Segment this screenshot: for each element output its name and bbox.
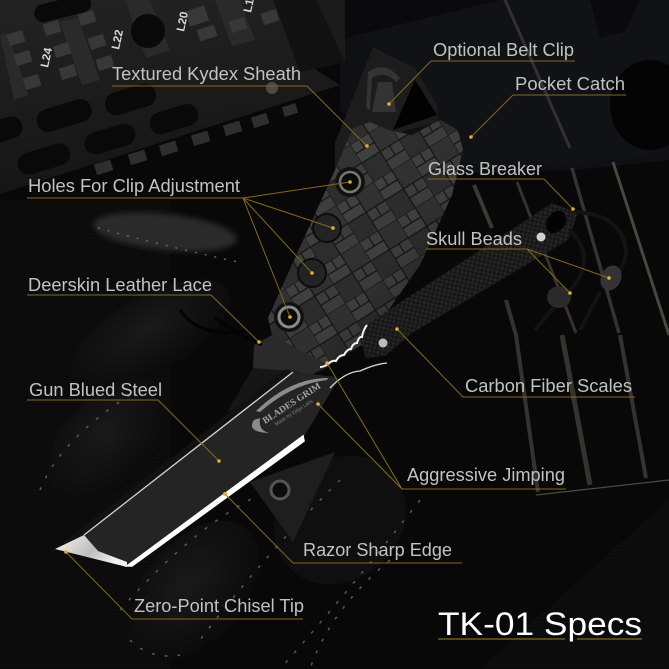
callout: optional belt clip: Optional Belt Clip xyxy=(433,39,574,60)
callout: carbon fiber scales xyxy=(395,327,635,397)
callout: aggressive jimping xyxy=(316,361,566,489)
rifle handguard: L24 xyxy=(39,46,55,69)
callout: gun blued steel xyxy=(27,379,221,463)
lanyard and skull beads xyxy=(535,212,626,330)
carbon fiber handle xyxy=(360,203,578,358)
callout: holes for clip adjustment xyxy=(27,175,352,319)
callout: deerskin leather lace xyxy=(27,274,261,344)
callout: skull beads: Skull Beads xyxy=(426,228,522,249)
callout: optional belt clip xyxy=(387,39,575,106)
cutting edge xyxy=(127,436,304,566)
callout: skull beads xyxy=(426,228,611,295)
rifle handguard: L20 xyxy=(175,11,191,33)
reaper logo xyxy=(366,67,400,112)
deerskin leather lace wrap xyxy=(180,310,330,412)
callout: gun blued steel: Gun Blued Steel xyxy=(29,379,162,400)
blade logo xyxy=(252,378,328,433)
glove xyxy=(25,207,432,669)
callout: glass breaker: Glass Breaker xyxy=(428,158,542,179)
blade logo: Made by Edge Labs xyxy=(274,398,315,428)
callout: textured kydex sheath: Textured Kydex Sheath xyxy=(112,63,301,84)
callout: pocket catch xyxy=(469,73,626,139)
clip hole lower grommet xyxy=(274,302,304,332)
clip hole grommet xyxy=(335,167,365,197)
skull bead left xyxy=(547,286,571,308)
blade xyxy=(55,325,387,567)
callout: holes for clip adjustment: Holes For Clip Adjustment xyxy=(28,175,240,196)
skull bead right xyxy=(596,262,626,294)
blade logo: BLADES GRIM xyxy=(261,381,323,427)
callout: glass breaker xyxy=(428,158,575,211)
callout: pocket catch: Pocket Catch xyxy=(515,73,625,94)
rifle handguard xyxy=(0,0,345,194)
chisel tip xyxy=(55,535,127,567)
callout: zero-point chisel tip: Zero-Point Chisel Tip xyxy=(134,595,304,616)
callout: textured kydex sheath xyxy=(112,63,369,148)
callout: aggressive jimping: Aggressive Jimping xyxy=(407,464,565,485)
callout: razor sharp edge xyxy=(223,492,462,563)
rifle receiver and magazine xyxy=(345,0,669,495)
belt clip xyxy=(335,47,438,172)
callout: deerskin leather lace: Deerskin Leather Lace xyxy=(28,274,212,295)
textured kydex sheath xyxy=(268,120,463,366)
blade dark bevel xyxy=(55,369,296,549)
rail teeth xyxy=(94,103,298,175)
clip screw 1 xyxy=(313,214,341,242)
title: TK-01 Specs xyxy=(438,606,642,642)
callout: zero-point chisel tip xyxy=(64,550,304,619)
rail ridges xyxy=(0,0,255,100)
rail blocks xyxy=(7,5,279,90)
callout: carbon fiber scales: Carbon Fiber Scales xyxy=(465,375,632,396)
clip screw 2 xyxy=(298,259,326,287)
lower guard highlight xyxy=(330,363,387,388)
callout: razor sharp edge: Razor Sharp Edge xyxy=(303,539,452,560)
jimping xyxy=(320,325,367,367)
rifle handguard: L22 xyxy=(110,29,126,51)
rail slots xyxy=(0,0,201,177)
